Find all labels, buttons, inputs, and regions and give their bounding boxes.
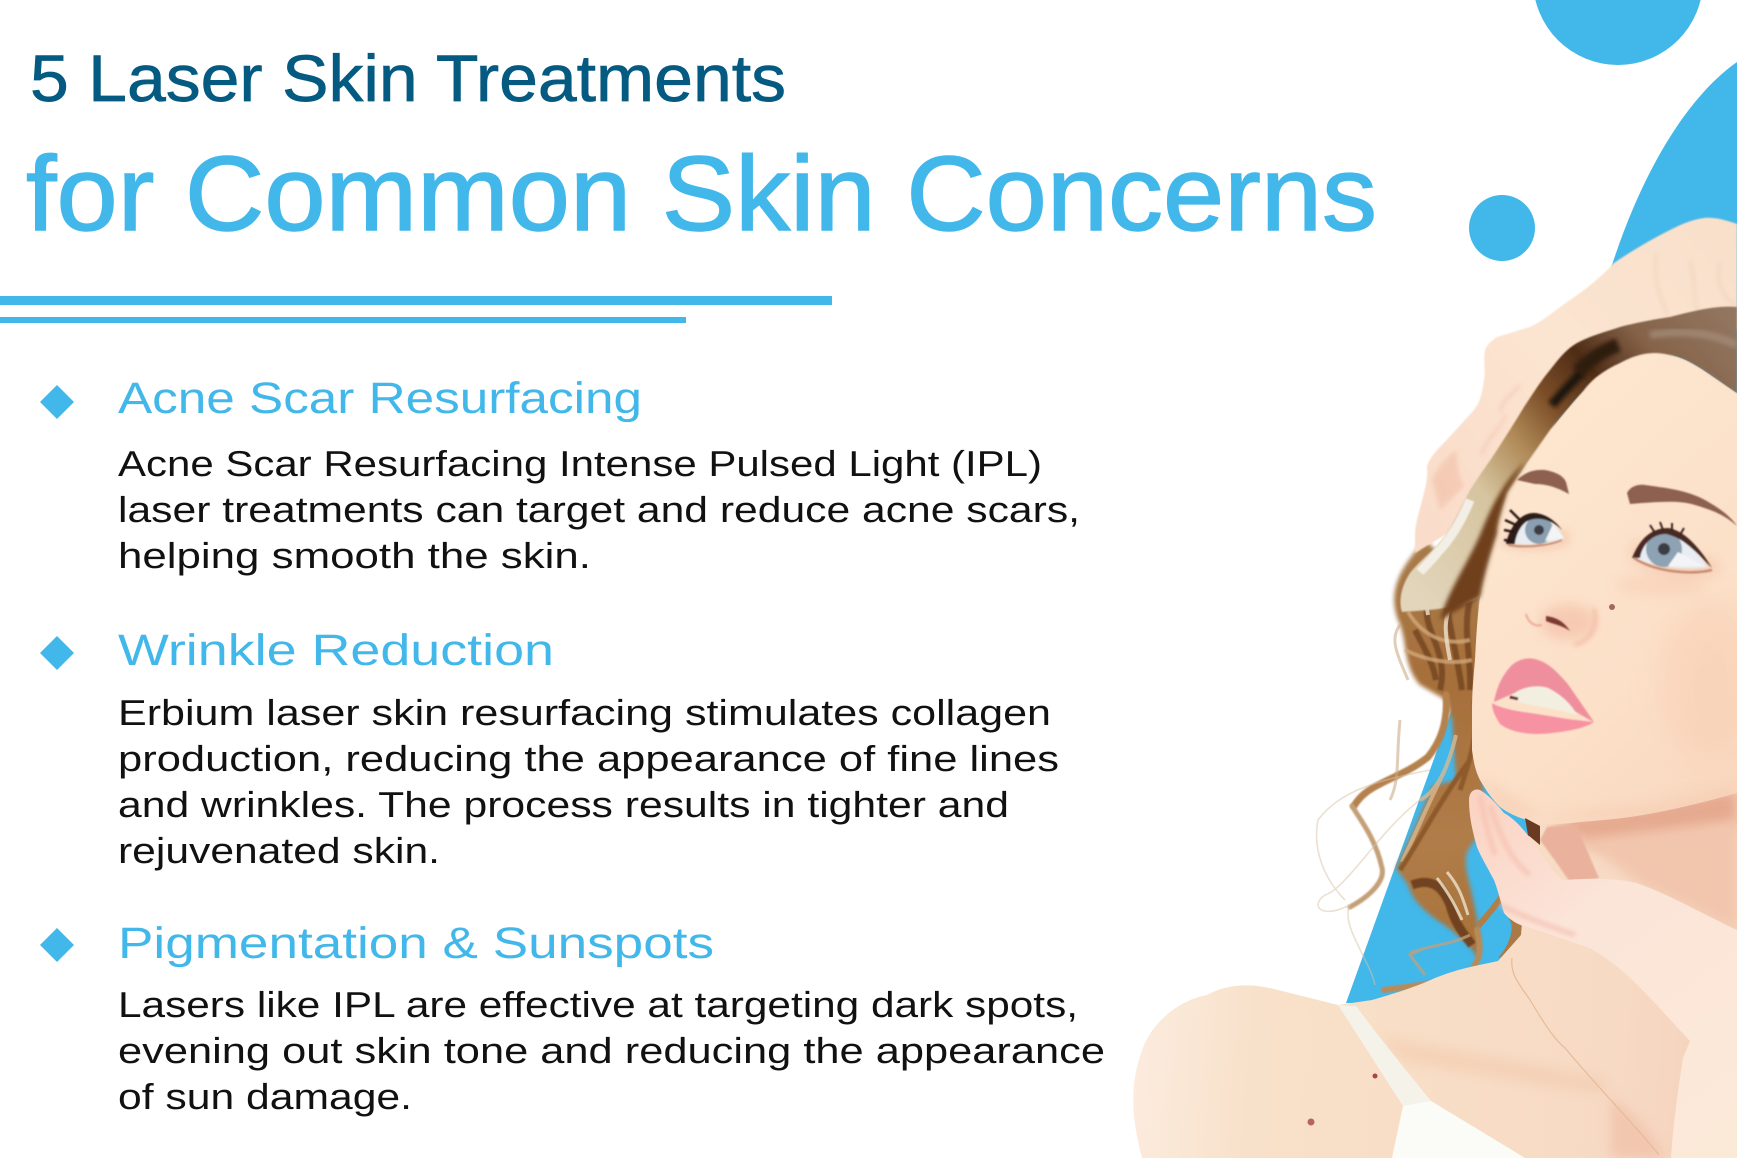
- body text: [118, 984, 1105, 1117]
- face: [1472, 353, 1737, 824]
- decorative circle top right: [1533, 0, 1703, 65]
- body text: laser treatments can target and reduce acne scars,: [118, 489, 1080, 530]
- eye right: [1632, 522, 1712, 572]
- torso and shoulder: [1133, 760, 1737, 1158]
- lower hand and forearm: [1469, 789, 1737, 1158]
- heading: Wrinkle Reduction: [118, 626, 554, 675]
- icon: diamond bullet: [40, 928, 74, 962]
- body text: rejuvenated skin.: [118, 830, 440, 871]
- icon: diamond bullet: [40, 385, 74, 419]
- facial shading: [1480, 530, 1737, 822]
- double rule under title: [0, 296, 832, 323]
- eye left: [1504, 510, 1564, 546]
- decorative small circle: [1469, 195, 1535, 261]
- heading: Acne Scar Resurfacing: [118, 374, 642, 423]
- list item: wrinkle reduction: [40, 626, 1059, 871]
- body text: [118, 443, 1080, 576]
- body text: Erbium laser skin resurfacing stimulates collagen: [118, 692, 1051, 733]
- back finger: [1540, 826, 1599, 885]
- nose: [1526, 608, 1595, 645]
- back hair curls: [1317, 540, 1525, 990]
- list item: pigmentation and sunspots: [40, 919, 1105, 1117]
- body text: of sun damage.: [118, 1076, 412, 1117]
- moles on shoulder: [1308, 1074, 1378, 1126]
- necklace: [1512, 958, 1659, 1155]
- title: [26, 41, 1377, 253]
- title line 2: for Common Skin Concerns: [26, 135, 1377, 253]
- body text: and wrinkles. The process results in tighter and: [118, 784, 1009, 825]
- icon: diamond bullet: [40, 636, 74, 670]
- mole: [1609, 604, 1615, 610]
- body text: production, reducing the appearance of fine lines: [118, 738, 1059, 779]
- heading: Pigmentation & Sunspots: [118, 919, 714, 968]
- lips: [1492, 658, 1594, 734]
- body text: Acne Scar Resurfacing Intense Pulsed Light (IPL): [118, 443, 1042, 484]
- top strap: [1338, 1005, 1525, 1158]
- body text: Lasers like IPL are effective at targeting dark spots,: [118, 984, 1078, 1025]
- front hair along hairline: [1400, 307, 1737, 620]
- palm and fingers: [1469, 789, 1737, 1158]
- gap shadow: [1525, 818, 1540, 845]
- decorative blue shape behind woman: [1346, 62, 1737, 1003]
- body text: evening out skin tone and reducing the appearance: [118, 1030, 1105, 1071]
- brown strands beside temple: [1440, 462, 1525, 620]
- woman photo illustration: [1133, 218, 1737, 1158]
- shadows on neck and collarbone: [1380, 790, 1737, 1158]
- upper hand: [1415, 218, 1737, 553]
- body text: [118, 692, 1059, 871]
- eyebrows: [1517, 470, 1737, 526]
- body text: helping smooth the skin.: [118, 535, 591, 576]
- list item: acne scar resurfacing: [40, 374, 1080, 576]
- title line 1: 5 Laser Skin Treatments: [30, 41, 786, 115]
